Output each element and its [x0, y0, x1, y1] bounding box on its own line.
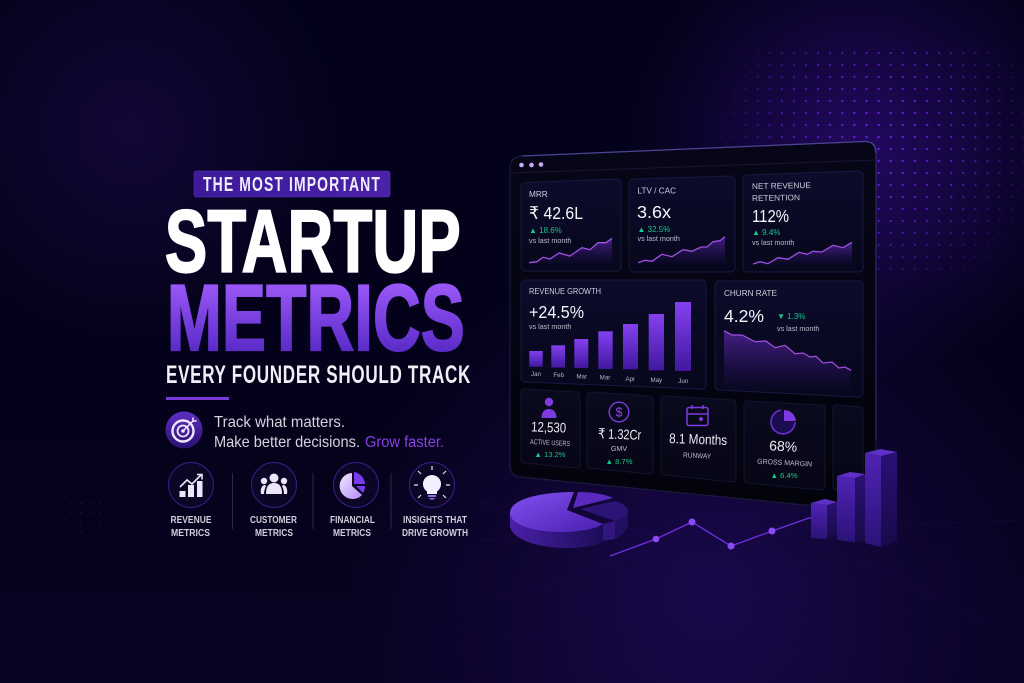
sparkline: LTV / CAC	[638, 237, 725, 266]
card: GMV: ₹ 1.32Cr	[598, 425, 642, 443]
card: net revenue retention: RETENTION	[752, 193, 800, 203]
card: gross margin: 68%	[769, 437, 798, 455]
card: revenue growth: vs last month	[529, 322, 571, 331]
card: churn rate: 4.2%	[724, 306, 764, 326]
icon: calendar	[687, 405, 708, 426]
card: LTV / CAC	[629, 176, 735, 272]
icon: user	[542, 398, 556, 418]
title: startup: STARTUP	[165, 192, 461, 290]
card: gross margin: ▲ 6.4%	[771, 471, 798, 480]
bar chart: revenue growth: Feb	[553, 372, 565, 379]
icon: dollar: $	[616, 406, 623, 420]
area chart: churn rate	[724, 331, 851, 394]
card: gross margin	[744, 401, 825, 490]
badge: the most important: THE MOST IMPORTANT	[203, 174, 381, 196]
card: LTV / CAC: LTV / CAC	[638, 187, 676, 196]
line chart: floor trend	[610, 517, 812, 556]
category: financial metrics: FINANCIAL	[330, 515, 375, 526]
category: insights	[402, 462, 468, 539]
category: financial metrics: METRICS	[333, 528, 371, 539]
window controls	[519, 162, 543, 167]
card: churn rate: CHURN RATE	[724, 289, 778, 298]
card: runway: 8.1 Months	[669, 430, 727, 448]
3d pie chart	[510, 492, 628, 548]
card: runway: RUNWAY	[683, 450, 712, 461]
card: net revenue retention	[743, 171, 863, 272]
card: GMV: ▲ 8.7%	[606, 457, 633, 466]
3d bar chart	[811, 449, 897, 547]
card: net revenue retention: NET REVENUE	[752, 181, 812, 191]
title: metrics: METRICS	[167, 265, 465, 370]
category: insights: INSIGHTS THAT	[403, 515, 467, 526]
card: MRR: ₹ 42.6L	[529, 203, 583, 223]
category: revenue metrics: METRICS	[171, 528, 210, 539]
panel: dashboard monitor	[510, 141, 876, 512]
bar chart: revenue growth: Jun	[678, 378, 689, 385]
bar: medium	[837, 472, 865, 542]
card: MRR	[521, 179, 621, 271]
card: partial	[833, 405, 863, 490]
bar chart: revenue growth: Mar	[600, 374, 610, 382]
card: GMV	[587, 392, 653, 474]
bar chart: revenue growth: Mar	[576, 374, 587, 380]
card: net revenue retention: vs last month	[752, 238, 794, 247]
bar: short	[811, 499, 837, 539]
category: revenue metrics: REVENUE	[170, 515, 212, 526]
icon: target	[166, 412, 202, 448]
bar chart: revenue growth: May	[650, 377, 663, 384]
bar chart: revenue growth: Jan	[531, 371, 542, 378]
category: revenue metrics	[168, 462, 214, 539]
card: revenue growth	[521, 280, 706, 389]
card: LTV / CAC: vs last month	[638, 234, 680, 243]
category: customer metrics: CUSTOMER	[250, 515, 298, 526]
card: active users: 12,530	[531, 418, 567, 436]
sparkline: MRR	[529, 238, 612, 266]
card: churn rate	[715, 281, 863, 397]
category: customer metrics	[250, 462, 298, 539]
category: customer metrics: METRICS	[255, 528, 293, 539]
bar chart: revenue growth: Apr	[625, 376, 635, 383]
bar chart: revenue growth	[529, 302, 691, 385]
card: active users: ▲ 13.2%	[534, 450, 566, 459]
card: gross margin: GROSS MARGIN	[757, 457, 812, 468]
card: LTV / CAC: ▲ 32.5%	[638, 225, 670, 234]
tagline	[214, 414, 444, 451]
card: MRR: vs last month	[529, 236, 571, 245]
card: MRR: ▲ 18.6%	[529, 226, 562, 235]
card: net revenue retention: 112%	[752, 206, 789, 226]
subtitle: EVERY FOUNDER SHOULD TRACK	[166, 361, 471, 389]
tagline: Make better decisions.	[214, 434, 360, 451]
badge: the most important	[194, 171, 390, 197]
bar: tall	[865, 449, 897, 547]
card: revenue growth: +24.5%	[529, 302, 584, 322]
card: LTV / CAC: 3.6x	[637, 202, 671, 222]
card: churn rate: ▼ 1.3%	[777, 312, 805, 321]
tagline: Grow faster.	[365, 434, 444, 451]
card: churn rate: vs last month	[777, 324, 819, 333]
card: net revenue retention: ▲ 9.4%	[752, 228, 780, 237]
card: active users	[521, 389, 580, 468]
headline block	[165, 171, 471, 389]
card: revenue growth: REVENUE GROWTH	[529, 287, 601, 296]
card: MRR: MRR	[529, 190, 548, 199]
panel: metric categories	[168, 462, 468, 539]
sparkline: net revenue retention	[753, 242, 852, 267]
card: GMV: GMV	[611, 444, 627, 453]
card: runway	[661, 396, 736, 482]
tagline: Track what matters.	[214, 414, 345, 431]
icon: pie	[771, 410, 796, 434]
category: insights: DRIVE GROWTH	[402, 528, 468, 539]
card: active users: ACTIVE USERS	[530, 437, 570, 448]
category: financial metrics	[330, 462, 378, 539]
